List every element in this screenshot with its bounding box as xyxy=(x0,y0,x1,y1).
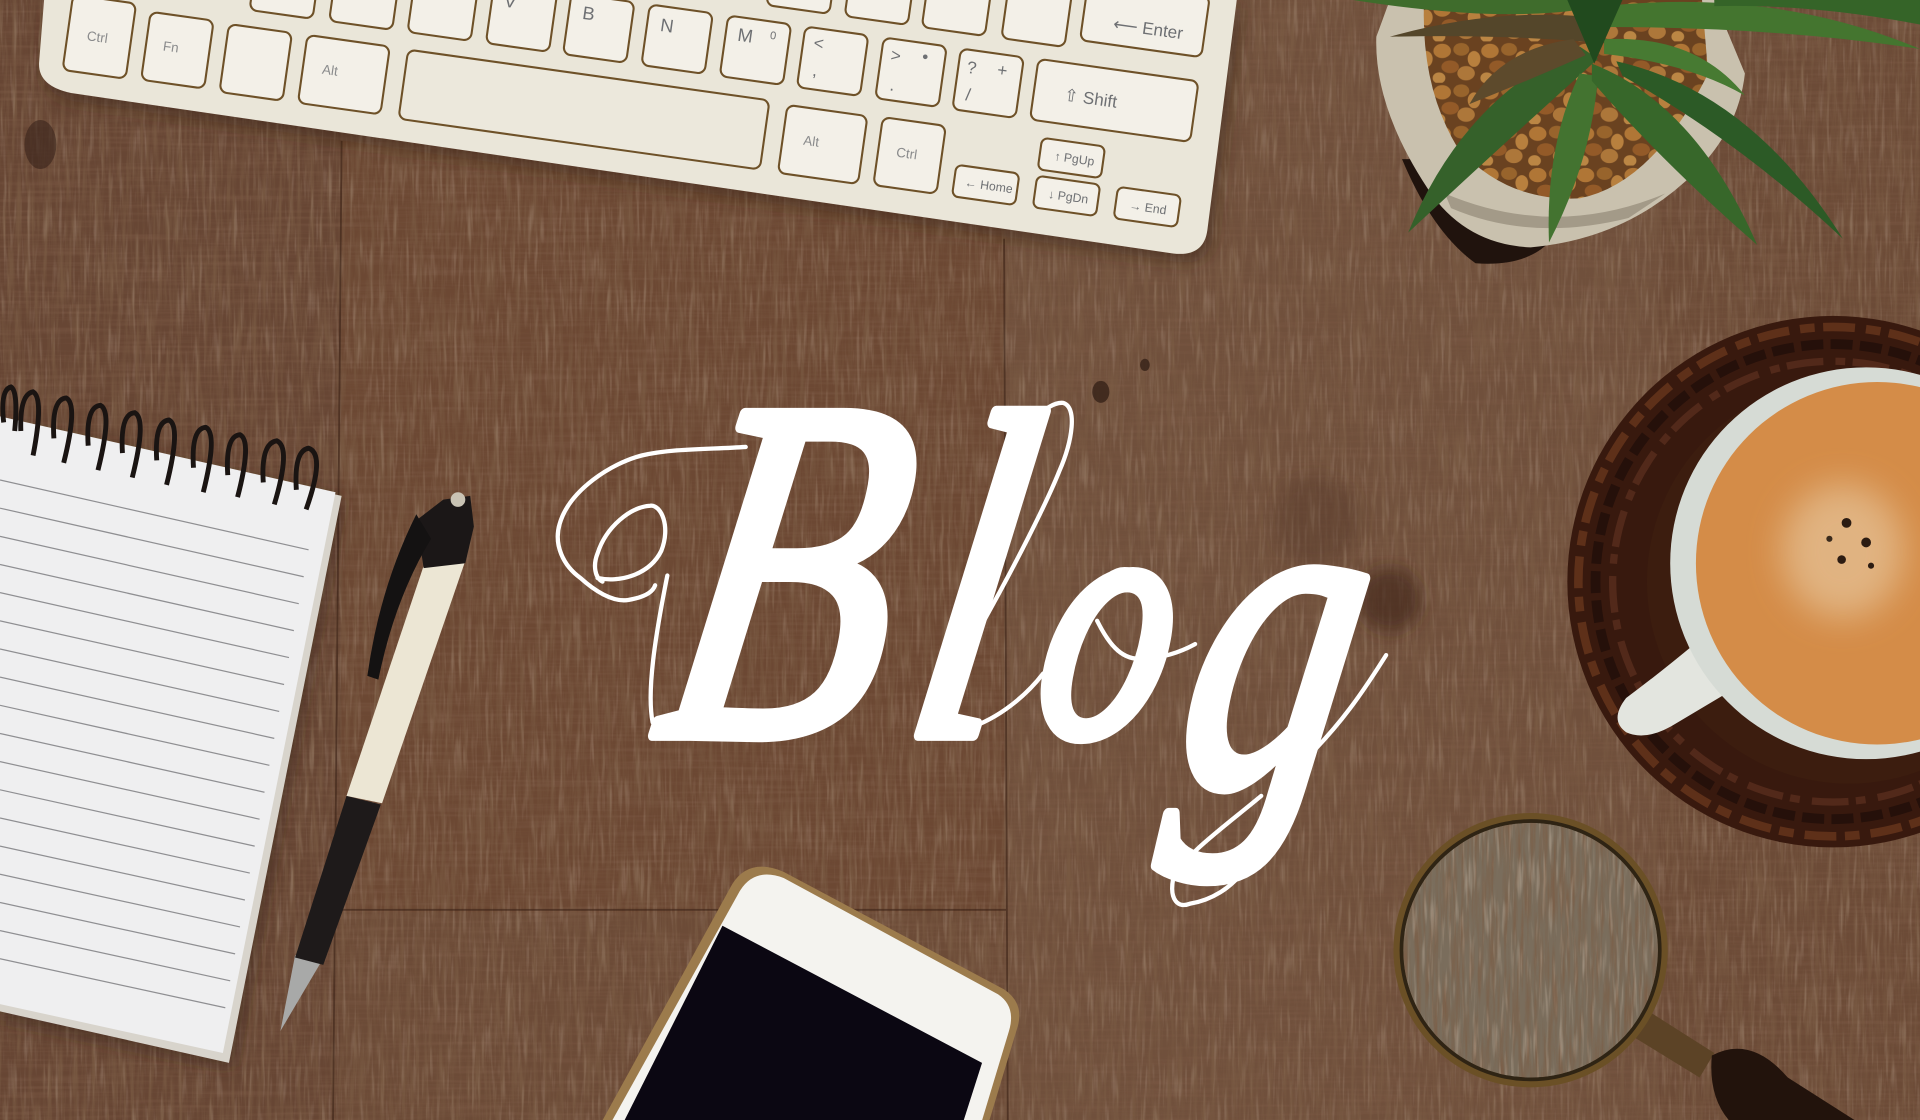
keyboard key labels: → End xyxy=(1128,198,1168,217)
keyboard key labels: ← Home xyxy=(964,176,1014,196)
title: Blog: l xyxy=(882,320,1070,836)
coffee foam xyxy=(1782,484,1904,618)
keyboard key labels xyxy=(86,0,1185,217)
keyboard key labels: Alt xyxy=(802,133,820,150)
smartphone xyxy=(602,867,1019,1120)
title: Blog: o xyxy=(1015,430,1211,810)
flourishes of the blog lettering xyxy=(558,403,1386,905)
keyboard key labels: . xyxy=(889,74,896,95)
title: Blog: B xyxy=(631,298,951,841)
keyboard key labels: 0 xyxy=(769,30,777,43)
keyboard key labels: ↑ PgUp xyxy=(1054,149,1095,169)
keyboard key labels: Ctrl xyxy=(895,145,918,162)
keyboard key labels: / xyxy=(964,84,972,105)
notebook xyxy=(0,387,343,1068)
keyboard key labels: • xyxy=(921,46,930,67)
keyboard key labels: ⇧ Shift xyxy=(1063,85,1119,112)
notebook spiral rings xyxy=(3,387,317,509)
coffee xyxy=(1696,382,1920,744)
keyboard key labels: + xyxy=(996,59,1009,81)
magnifier lens xyxy=(1396,820,1665,1080)
magnifying glass xyxy=(1393,813,1855,1120)
wooden coaster xyxy=(1567,316,1920,847)
phone screen xyxy=(624,926,982,1120)
potted plant xyxy=(1353,0,1920,264)
keyboard key labels: Ctrl xyxy=(86,28,109,46)
keyboard key labels: Fn xyxy=(162,38,180,55)
keyboard key labels: N xyxy=(659,14,675,37)
keyboard key labels: M xyxy=(736,24,754,47)
keyboard key labels: ⟵ Enter xyxy=(1112,14,1185,43)
keyboard key labels: > xyxy=(890,45,902,66)
notebook ruled lines xyxy=(0,480,309,1008)
keyboard key labels: B xyxy=(581,2,596,24)
keyboard key labels: < xyxy=(812,32,825,54)
title: Blog: g xyxy=(1152,381,1410,883)
pen xyxy=(280,492,474,1031)
cup handle xyxy=(1618,643,1729,736)
plant leaves xyxy=(1353,0,1920,245)
coffee cup on wooden coaster xyxy=(1567,316,1920,847)
keyboard xyxy=(39,0,1242,262)
keyboard key labels: Alt xyxy=(321,62,339,79)
keyboard key labels: ↓ PgDn xyxy=(1047,187,1089,207)
cup xyxy=(1670,367,1920,759)
keyboard key labels: ? xyxy=(966,57,978,78)
keyboard keys xyxy=(63,0,1210,227)
keyboard key labels: , xyxy=(811,60,819,80)
